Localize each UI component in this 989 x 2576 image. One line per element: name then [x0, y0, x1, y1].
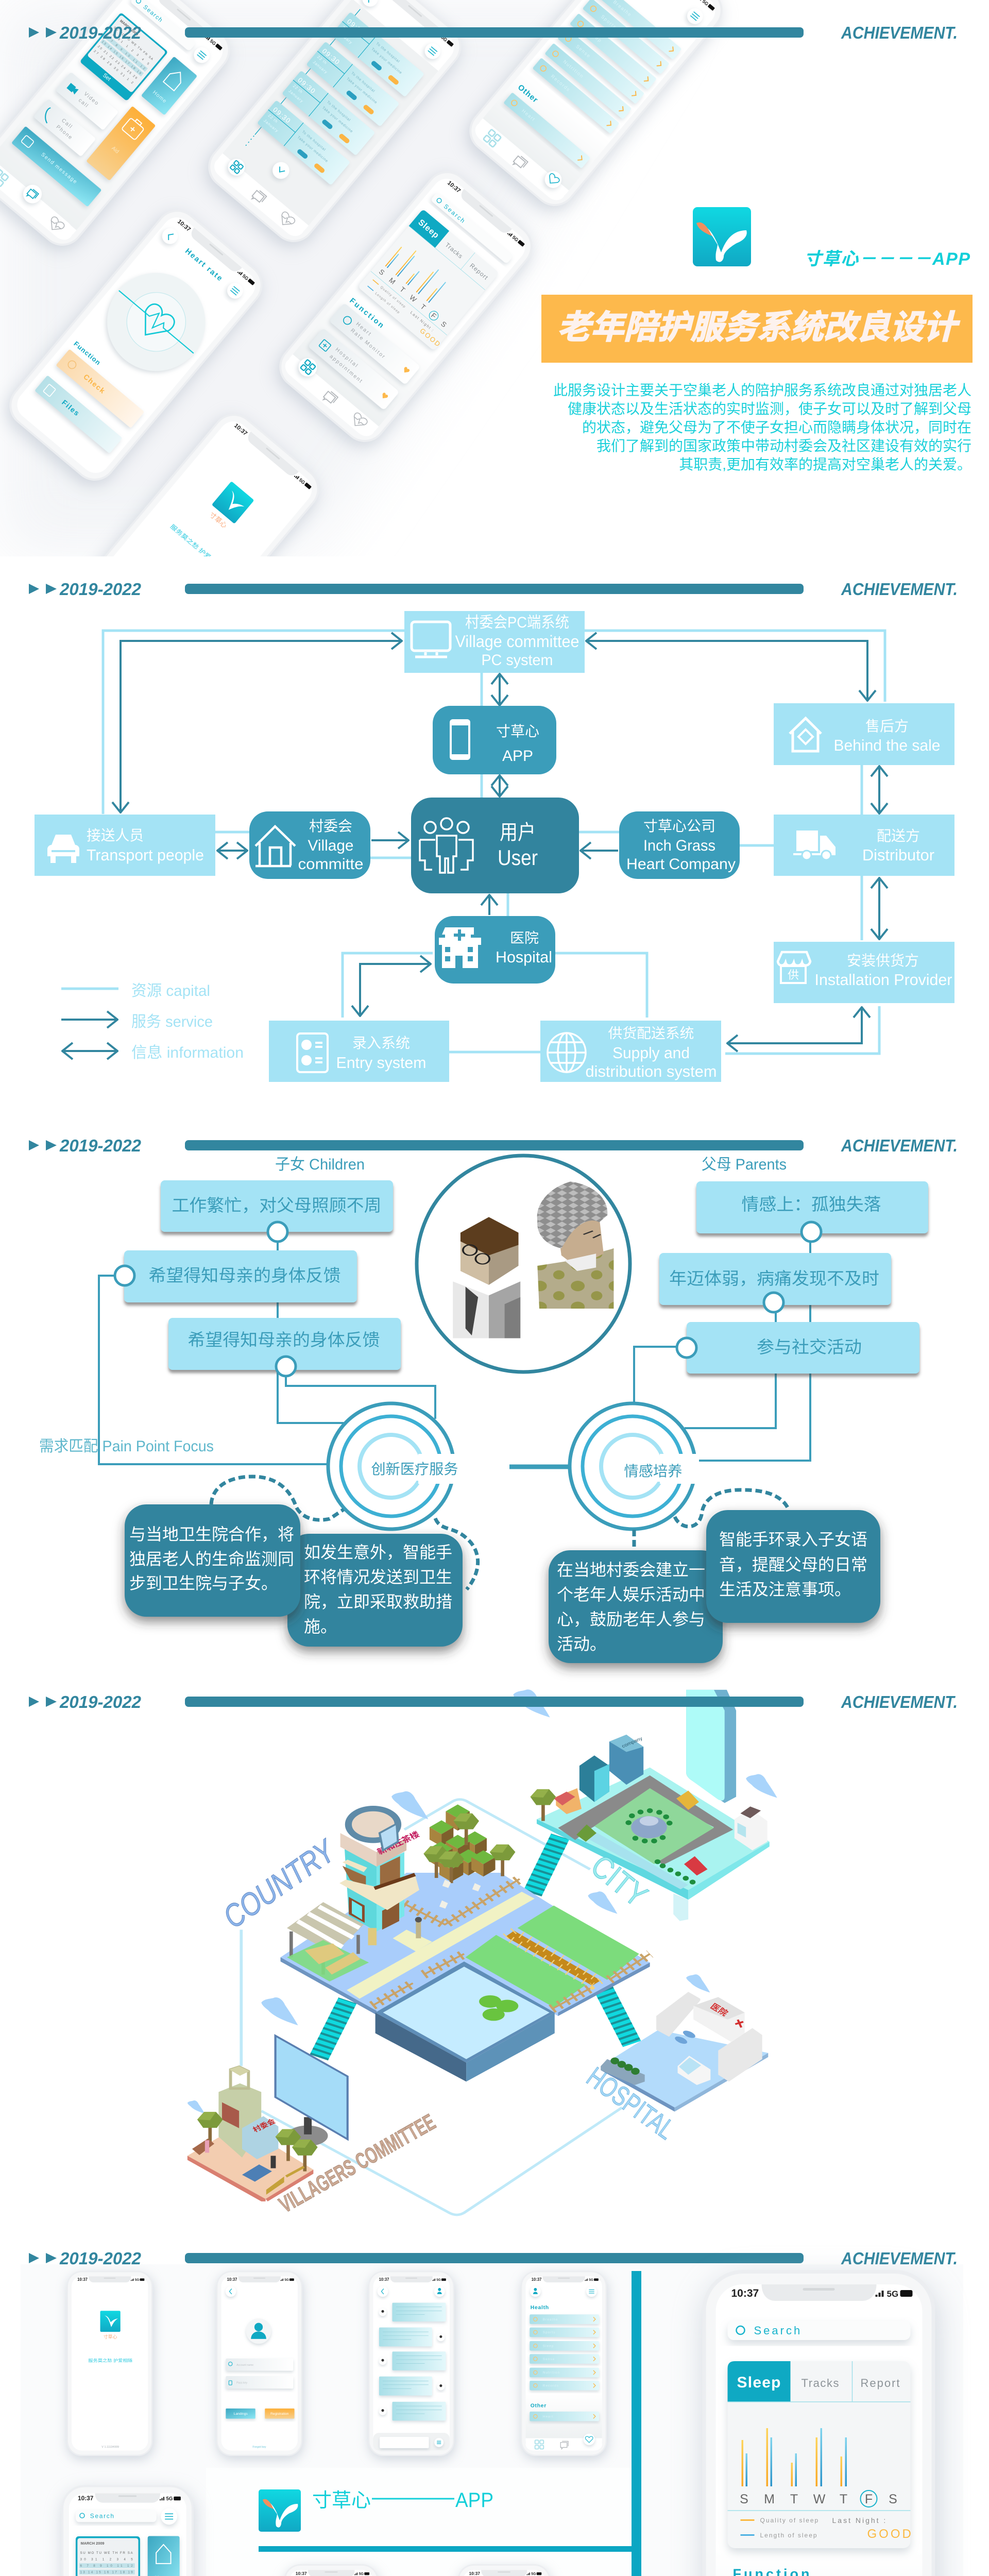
node: inch grass heart company [619, 811, 740, 879]
node: installation provider: 安装供货方 [847, 953, 919, 969]
node: behind the sale: Behind the sale [833, 736, 941, 754]
node: behind the sale [774, 703, 954, 765]
title banner [541, 295, 973, 363]
phone screen: health menu [521, 2271, 608, 2460]
city platform [531, 1735, 770, 1921]
solution card: village activity centre [549, 1550, 723, 1663]
section header 4: 2019-2022 [59, 1692, 142, 1711]
phone screen: heart rate [457, 2564, 551, 2576]
need box: lonely parents: 情感上：孤独失落 [742, 1195, 881, 1214]
title banner: 老年陪护服务系统改良设计 [557, 309, 960, 346]
section 5 background panel [21, 2264, 963, 2576]
node: user: 用户 [500, 821, 536, 844]
capital flow lines [103, 631, 885, 1054]
solution card: village activity centre: 在当地村委会建立一 [557, 1561, 705, 1579]
node: hospital: Hospital [496, 948, 552, 966]
section header 1: ACHIEVEMENT. [841, 23, 958, 42]
node: hospital: 医院 [510, 930, 539, 946]
phone screen: sleep large [703, 2270, 937, 2576]
node: inch grass heart company: Heart Company [626, 856, 736, 873]
solution card: village activity centre: 心，鼓励老年人参与 [557, 1610, 705, 1629]
ring: emotional cultivation: 情感培养 [624, 1463, 682, 1479]
ring: innovative medical service [328, 1403, 458, 1529]
solution card: village activity centre: 活动。 [557, 1635, 606, 1653]
node: inch grass heart company: 寸草心公司 [643, 818, 715, 834]
node: behind the sale: 售后方 [865, 718, 909, 734]
label: COUNTRY: COUNTRY [217, 1833, 343, 1935]
node: entry system: Entry system [336, 1054, 427, 1072]
intro paragraph: 其职责,更加有效率的提高对空巢老人的关爱。 [679, 456, 971, 472]
intro paragraph: 我们了解到的国家政策中带动村委会及社区建设有效的实行 [596, 438, 971, 454]
parents heading: 父母 Parents [702, 1156, 787, 1173]
phone screen: chat [368, 2271, 455, 2460]
label: VILLAGERS COMMITTEE: VILLAGERS COMMITTEE [275, 2109, 440, 2218]
intro paragraph: 的状态，避免父母为了不使子女担心而隐瞒身体状况，同时在 [582, 419, 971, 435]
legend [61, 982, 244, 1061]
need box: feedback 2: 希望得知母亲的身体反馈 [187, 1330, 380, 1349]
node: transport people: Transport people [87, 846, 204, 864]
need box: frail parents [659, 1253, 891, 1305]
node: village committee [249, 811, 370, 879]
section header 3: 2019-2022 [59, 1136, 142, 1155]
solution card: medical hand-off (second): 院，立即采取救助措 [304, 1592, 452, 1611]
node: user: User [498, 845, 538, 870]
solution card: medical hand-off (second): 环将情况发送到卫生 [304, 1568, 452, 1586]
service and information arrows [121, 641, 879, 1043]
solution card: voice reminders: 音，提醒父母的日常 [719, 1555, 867, 1574]
phone screen: splash [66, 2271, 154, 2460]
node: app [433, 706, 556, 774]
tower building with watch [287, 1808, 421, 1981]
villagers committee platform [187, 2066, 318, 2201]
main country platform [281, 1873, 650, 2081]
intro paragraph [553, 382, 971, 472]
node: village committee: committe [298, 856, 364, 873]
node: distributor: Distributor [862, 846, 934, 864]
solution card: medical hand-off (first) [125, 1504, 300, 1617]
need box: feedback 1: 希望得知母亲的身体反馈 [148, 1266, 341, 1285]
phone mockup: splash screen [54, 405, 329, 698]
need box: lonely parents [696, 1181, 928, 1233]
central portrait circle [417, 1156, 630, 1372]
phone mockup: schedule screen [196, 0, 471, 256]
section header 1 [29, 23, 958, 42]
solution card: voice reminders: 智能手环录入子女语 [719, 1530, 867, 1549]
phone mockup: health menu screen [457, 0, 732, 219]
phone screen: home [61, 2485, 195, 2576]
node: supply and distribution system: distribution system [585, 1062, 717, 1080]
solution card: medical hand-off (first): 步到卫生院与子女。 [129, 1574, 278, 1592]
need box: busy children [161, 1180, 393, 1232]
solution card: village activity centre: 个老年人娱乐活动中 [557, 1585, 705, 1604]
phone mockup: sleep screen [267, 162, 542, 455]
node: supply and distribution system: 供货配送系统 [608, 1026, 694, 1041]
section header 4 [29, 1692, 958, 1711]
node: supply and distribution system [540, 1021, 721, 1082]
node: user [411, 798, 579, 893]
need box: busy children: 工作繁忙，对父母照顾不周 [172, 1196, 381, 1215]
solution card: medical hand-off (second): 如发生意外，智能手 [304, 1543, 452, 1562]
section header 2: 2019-2022 [59, 580, 142, 599]
node: village committee PC system: PC system [481, 652, 553, 669]
solution card: voice reminders: 生活及注意事项。 [719, 1580, 851, 1599]
solution card: medical hand-off (first): 独居老人的生命监测同 [129, 1550, 294, 1568]
connector ports [115, 1222, 821, 1376]
node: supply and distribution system: Supply and [612, 1044, 690, 1062]
intro paragraph: 健康状态以及生活状态的实时监测，使子女可以及时了解到父母 [568, 401, 971, 417]
section header 2: ACHIEVEMENT. [841, 580, 958, 599]
city platform: company [621, 1736, 644, 1749]
phone screen: schedule [284, 2564, 380, 2576]
app brand block: 寸草心 [312, 2490, 371, 2512]
need box: feedback 1 [124, 1250, 357, 1302]
node: installation provider [774, 942, 954, 1003]
node: village committee PC system: Village committee [455, 632, 579, 651]
icon: app logo [693, 207, 751, 266]
node: entry system: 录入系统 [352, 1035, 410, 1051]
tower building with watch: 新和庄茶楼 [375, 1829, 421, 1856]
section header 3: ACHIEVEMENT. [841, 1136, 958, 1155]
node: distributor: 配送方 [877, 828, 920, 844]
phone mockup: heart rate screen [0, 201, 272, 494]
section header 5 [29, 2249, 958, 2268]
section header 2 [29, 580, 958, 599]
app brand block: APP [455, 2489, 493, 2512]
hospital platform [601, 1992, 768, 2112]
node: village committee: Village [308, 837, 353, 854]
section header 4: ACHIEVEMENT. [841, 1692, 958, 1711]
node: installation provider: 供 [788, 969, 799, 981]
node: transport people: 接送人员 [87, 827, 144, 843]
node: installation provider: Installation Provider [815, 971, 952, 989]
section header 1: 2019-2022 [59, 23, 142, 42]
node: village committee PC system: 村委会PC端系统 [465, 614, 569, 631]
legend: 服务 service [131, 1013, 213, 1030]
billboard [276, 2036, 348, 2146]
pain point label: 需求匹配 Pain Point Focus [39, 1438, 214, 1455]
node: app: APP [502, 748, 533, 765]
section header 5: 2019-2022 [59, 2249, 142, 2268]
node: transport people [35, 815, 215, 876]
teal dividers [259, 2271, 641, 2576]
connector lines [99, 1232, 810, 1464]
node: inch grass heart company: Inch Grass [643, 837, 715, 854]
stairs [319, 1837, 632, 2057]
ring connector [509, 1464, 571, 1469]
need box: feedback 2 [168, 1318, 401, 1370]
phone mockup: home screen [0, 0, 240, 259]
app brand block [259, 2489, 493, 2532]
intro paragraph: 此服务设计主要关于空巢老人的陪护服务系统改良通过对独居老人 [553, 382, 971, 398]
solution card: medical hand-off (first): 与当地卫生院合作，将 [129, 1525, 294, 1544]
phone screen: login [216, 2271, 303, 2460]
legend: 资源 capital [131, 982, 210, 999]
farm: cubes and trees [415, 1804, 516, 1938]
big phone [686, 1690, 736, 1803]
need box: social activities: 参与社交活动 [757, 1337, 862, 1357]
node: entry system [269, 1021, 449, 1082]
need box: frail parents: 年迈体弱，病痛发现不及时 [669, 1269, 879, 1288]
ring: emotional cultivation [570, 1403, 699, 1529]
node: village committee: 村委会 [309, 818, 352, 834]
isometric map illustration [187, 1689, 777, 2215]
solution card: medical hand-off (second): 施。 [304, 1617, 337, 1636]
solution card: medical hand-off (second) [287, 1534, 463, 1647]
ring: innovative medical service: 创新医疗服务 [371, 1461, 458, 1477]
app name label: 寸草心－－－－APP [804, 249, 970, 269]
white app-title area [206, 2468, 632, 2576]
clouds [187, 1689, 777, 2113]
label: HOSPITAL: HOSPITAL [581, 2061, 680, 2145]
hospital platform: 医院 [708, 2002, 730, 2018]
section header 5: ACHIEVEMENT. [841, 2249, 958, 2268]
section header 3 [29, 1136, 958, 1155]
background outline [241, 1800, 622, 2215]
node: distributor [774, 815, 954, 876]
label: CITY: CITY [584, 1848, 654, 1914]
legend: 信息 information [131, 1044, 244, 1061]
children heading: 子女 Children [275, 1156, 365, 1173]
solution card: voice reminders [706, 1510, 880, 1623]
node: village committee PC system [404, 611, 585, 673]
need box: social activities [687, 1322, 919, 1374]
node: app: 寸草心 [496, 723, 539, 739]
section 1: hero background [0, 0, 726, 556]
dashed connectors [211, 1477, 789, 1589]
villagers committee platform: 村委会 [251, 2117, 277, 2134]
node: hospital [435, 916, 555, 984]
